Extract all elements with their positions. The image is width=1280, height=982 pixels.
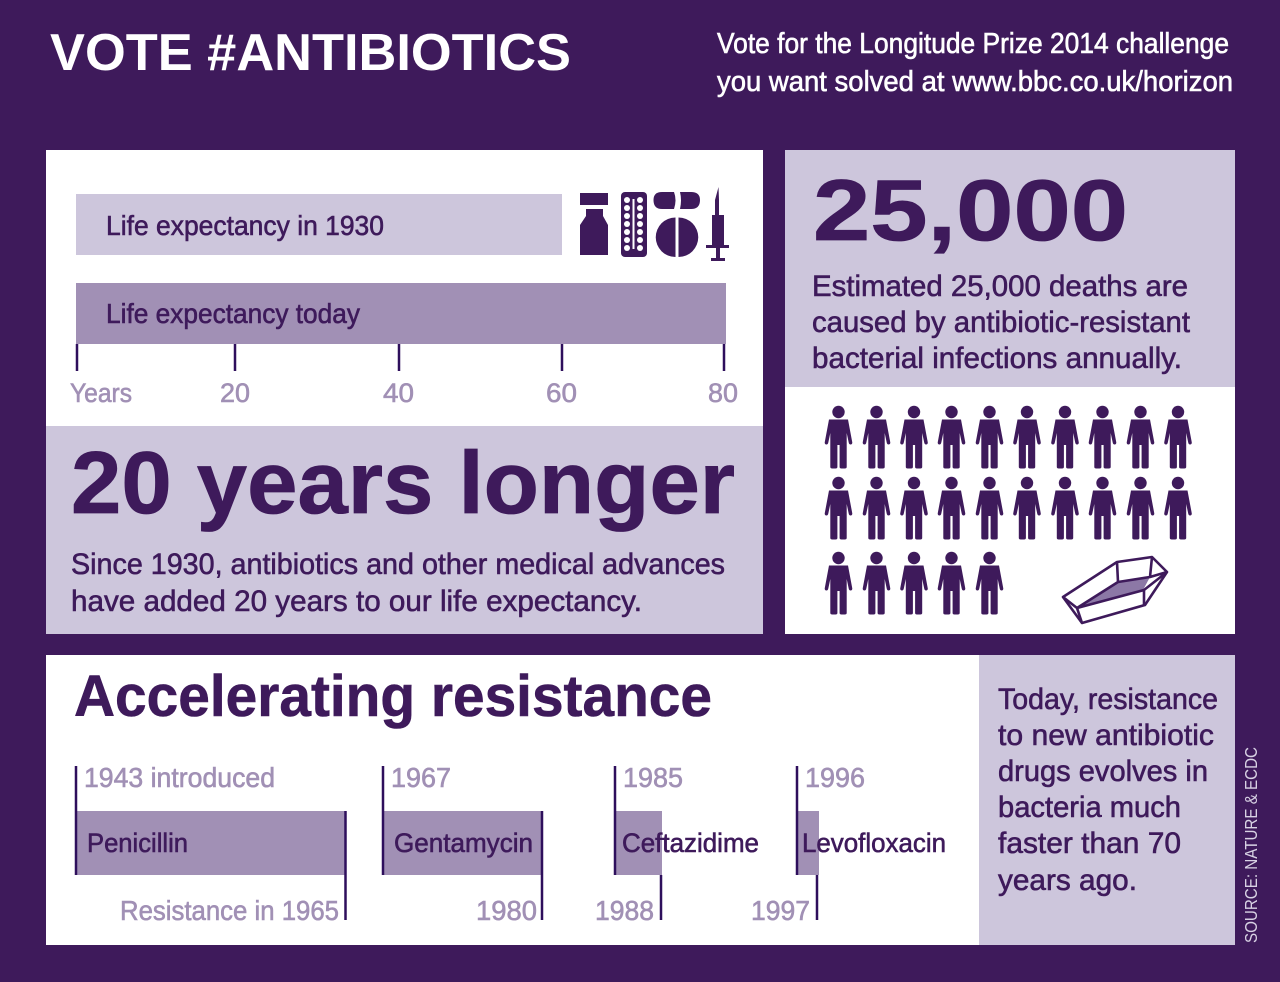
icon: capsule and tablet — [654, 192, 700, 257]
panel: resistance summary: bacteria much — [998, 791, 1181, 824]
axis: years: Years — [70, 378, 132, 408]
panel: accelerating resistance — [46, 655, 979, 945]
timeline: levofloxacin — [751, 762, 946, 926]
body text — [71, 548, 725, 618]
icon: blister pack — [621, 192, 647, 257]
panel: resistance summary: drugs evolves in — [998, 755, 1208, 788]
timeline: penicillin: Resistance in 1965 — [120, 895, 339, 926]
body text: have added 20 years to our life expectancy. — [71, 585, 642, 618]
title: VOTE #ANTIBIOTICS — [50, 24, 571, 82]
pictogram: people — [825, 406, 1192, 614]
timeline: penicillin: 1943 introduced — [84, 762, 275, 793]
headline: 25,000: 25,000 — [813, 163, 1128, 259]
headline: 20 years longer: 20 years longer — [71, 433, 735, 532]
bar: life expectancy today — [76, 283, 726, 344]
body text: bacterial infections annually. — [812, 342, 1182, 375]
panel: resistance summary: years ago. — [998, 864, 1137, 897]
heading: Accelerating resistance — [74, 664, 712, 729]
panel: 25,000 deaths — [785, 150, 1235, 387]
panel: life expectancy — [46, 150, 763, 426]
timeline: gentamycin: Gentamycin — [394, 828, 533, 858]
timeline: ceftazidime — [595, 762, 759, 926]
icon: coffin — [1063, 557, 1167, 623]
timeline: penicillin — [76, 762, 346, 926]
header call to action: Vote for the Longitude Prize 2014 challenge — [717, 28, 1229, 60]
body text: Since 1930, antibiotics and other medical advances — [71, 548, 725, 581]
body text — [812, 270, 1191, 375]
axis: years: 40 — [383, 378, 414, 408]
body text: caused by antibiotic-resistant — [812, 306, 1191, 339]
timeline: penicillin: Penicillin — [87, 828, 188, 858]
bar: life expectancy in 1930: Life expectancy in 1930 — [106, 210, 384, 241]
timeline: levofloxacin: 1997 — [751, 895, 810, 926]
source credit: SOURCE: NATURE & ECDC — [1241, 747, 1261, 943]
timeline: gentamycin: 1980 — [476, 895, 537, 926]
panel: resistance summary: to new antibiotic — [998, 719, 1214, 752]
axis: years: 60 — [546, 378, 577, 408]
panel: resistance summary — [979, 655, 1235, 945]
panel: resistance summary: faster than 70 — [998, 827, 1181, 860]
axis: years: 20 — [220, 378, 250, 408]
axis: years: 80 — [708, 378, 738, 408]
bar: life expectancy in 1930 — [76, 194, 562, 255]
header call to action — [717, 28, 1233, 98]
panel: people and coffin — [785, 387, 1235, 634]
header call to action: you want solved at www.bbc.co.uk/horizon — [717, 66, 1233, 98]
panel: resistance summary: Today, resistance — [998, 683, 1218, 716]
icon: medicine bottle — [580, 193, 608, 255]
icon: syringe — [706, 187, 729, 261]
timeline: ceftazidime: Ceftazidime — [622, 828, 759, 858]
panel: 20 years longer — [46, 426, 763, 634]
timeline: gentamycin: 1967 — [391, 762, 451, 793]
axis: years — [70, 344, 738, 408]
bar: life expectancy today: Life expectancy today — [106, 298, 360, 329]
timeline: ceftazidime: 1985 — [623, 762, 683, 793]
timeline: ceftazidime: 1988 — [595, 895, 654, 926]
timeline: levofloxacin: Levofloxacin — [802, 828, 946, 858]
timeline: gentamycin — [383, 762, 543, 926]
body text: Estimated 25,000 deaths are — [812, 270, 1188, 303]
timeline: levofloxacin: 1996 — [805, 762, 865, 793]
